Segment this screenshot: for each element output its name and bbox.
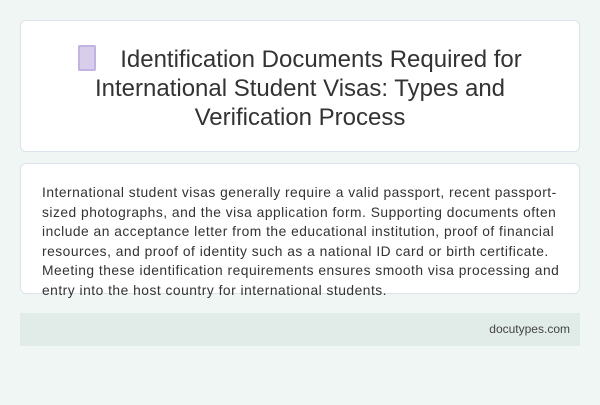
description text: International student visas generally require a valid passport, recent passport- — [42, 185, 557, 200]
header card — [20, 20, 580, 152]
title: Identification Documents Required for International Student Visas: Types and Verification Process — [95, 46, 522, 131]
footer bar — [20, 313, 580, 346]
icon: document scroll — [78, 45, 96, 71]
description text — [42, 185, 559, 298]
description panel — [20, 163, 580, 294]
description text: Meeting these identification requirements ensures smooth visa processing and — [42, 263, 559, 278]
description text: resources, and proof of identity such as a national ID card or birth certificate. — [42, 244, 549, 258]
description text: sized photographs, and the visa application form. Supporting documents often — [42, 204, 556, 220]
description text: entry into the host country for international students. — [42, 282, 387, 298]
description text: include an acceptance letter from the educational institution, proof of financial — [42, 224, 554, 239]
footer source: docutypes.com — [489, 322, 570, 336]
